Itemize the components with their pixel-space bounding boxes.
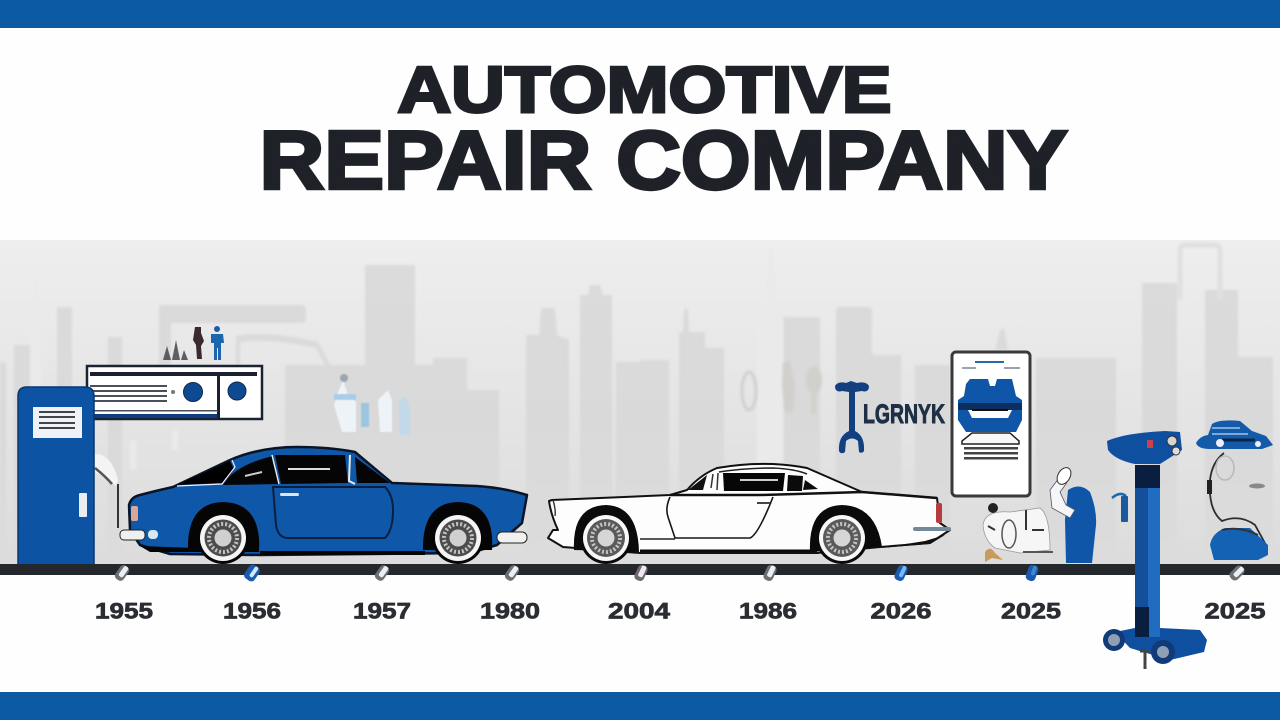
- wrench icon: [835, 381, 869, 453]
- blue car wheels: [197, 512, 484, 564]
- timeline year labels: 1956: [223, 598, 281, 624]
- people on panel: [163, 326, 224, 360]
- control panel: [87, 366, 262, 419]
- title: REPAIR COMPANY: [260, 114, 1068, 206]
- timeline year labels: 1955: [95, 598, 153, 624]
- timeline year labels: 1957: [353, 598, 411, 624]
- title: [260, 53, 1068, 206]
- timeline markers: [113, 563, 1246, 583]
- timeline year labels: 1980: [480, 598, 540, 624]
- garbled wrench label: LGRNYK: [863, 399, 945, 429]
- hook tool: [1112, 494, 1128, 522]
- timeline year labels: 2026: [870, 598, 932, 624]
- timeline year labels: [95, 598, 1266, 624]
- timeline year labels: 2025: [1204, 598, 1266, 624]
- top band: [0, 0, 1280, 28]
- bottom band: [0, 692, 1280, 720]
- ghost figures right: [742, 360, 822, 414]
- wheeled lift: [1103, 431, 1207, 669]
- blue car: [120, 447, 527, 555]
- vacuum hose and unit: [1207, 453, 1268, 560]
- ghost technicians: [334, 374, 410, 435]
- timeline bar: [0, 564, 1280, 575]
- fuel hose: [95, 454, 118, 528]
- timeline year labels: 2025: [1001, 598, 1061, 624]
- city skyline background: [0, 240, 1280, 565]
- title: AUTOMOTIVE: [398, 53, 892, 126]
- timeline year labels: 1986: [739, 598, 797, 624]
- small blue car: [1196, 420, 1273, 449]
- fuel pump: [18, 387, 94, 565]
- white car: [548, 464, 951, 553]
- repair equipment: [983, 503, 1053, 562]
- timeline year labels: 2004: [608, 598, 671, 624]
- white car wheels: [580, 512, 868, 564]
- mechanic: [1050, 465, 1096, 563]
- service screen board: [952, 352, 1030, 496]
